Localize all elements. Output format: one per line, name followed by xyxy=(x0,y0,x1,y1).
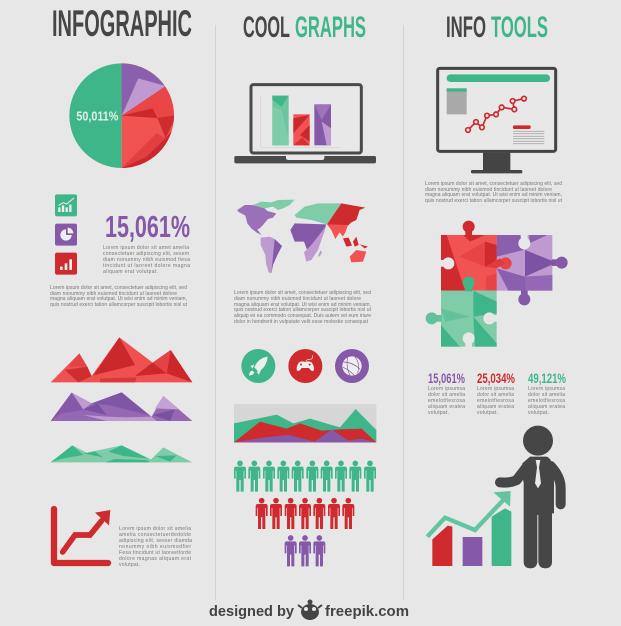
title: Cool Graphs xyxy=(243,11,366,44)
text block: chart note: amelia consectetuerdedolde xyxy=(119,532,191,538)
pie chart xyxy=(69,63,174,168)
text block: centre paragraph: quis nostrud exerci tation ullamcorper suscipit lobortis nisl ut xyxy=(234,307,372,313)
stat: purple: dolor sit amelia xyxy=(428,392,465,398)
text block: right paragraph: quis nostrud exerci tation ullamcorper suscipit lobortis nisl ut xyxy=(425,198,563,204)
text block: right paragraph xyxy=(425,181,563,204)
stat: purple: aliquam eratea xyxy=(428,404,465,410)
chart: green mountains xyxy=(51,445,192,462)
chart: purple mountains xyxy=(51,392,192,421)
text block: centre paragraph: aliquip ex ea commodo consequat. Duis autem vel eum iriure xyxy=(234,313,371,319)
stat: purple: 15,061% xyxy=(428,370,465,386)
text block: stat description xyxy=(103,245,190,275)
text block: right paragraph: magna aliquam erat volutpat. Ut wisi enim ad minim veniam, xyxy=(425,192,562,198)
text block: centre paragraph: magna aliquam erat volutpat. Ut wisi enim ad minim veniam, xyxy=(234,302,371,308)
text block: stat description: Lorem ipsum dolor sit amet amelia xyxy=(103,245,189,251)
stat: red: volutpat. xyxy=(477,410,498,416)
piece: purple xyxy=(497,234,568,305)
icon: rocket xyxy=(241,349,275,383)
stat: red xyxy=(477,370,515,416)
illustration: rising bars xyxy=(427,491,511,566)
icon: desktop monitor xyxy=(438,68,556,173)
greenland and arctic xyxy=(253,200,295,210)
stat: purple: volutpat. xyxy=(428,410,449,416)
south america xyxy=(261,237,282,273)
south asia xyxy=(327,224,348,239)
bar: red xyxy=(293,114,310,145)
text block: chart note: adipiscing elit, sesser diamda xyxy=(119,538,192,544)
text block: left paragraph xyxy=(50,285,188,308)
map: world xyxy=(237,200,368,273)
text block: chart note: nonummy nibh euismodfier xyxy=(119,544,191,550)
stat: green: dolor sit amelia xyxy=(528,392,565,398)
pictogram: green people xyxy=(234,460,376,492)
icon: laptop with bars xyxy=(234,85,376,163)
russia and east asia xyxy=(327,203,365,226)
icon: freepik logo xyxy=(298,600,322,620)
stat: purple: Lorem ipsumsa xyxy=(428,386,465,392)
bar: purple xyxy=(314,104,331,145)
footer credit: designed by xyxy=(209,603,295,620)
north america xyxy=(237,205,276,235)
stat: 15,061%: 15,061% xyxy=(105,209,190,244)
text block: chart note: Lorem ipsum dolor sit amelia xyxy=(119,526,191,532)
text block: chart note: Fesa tincidunt ut laoreetlorde xyxy=(119,550,191,556)
text block: centre paragraph: diam nonummy nibh euismod tincidunt ut laoreet dolore xyxy=(234,296,361,302)
text block: stat description: tincidunt ut laoreet dolore magna xyxy=(103,263,190,269)
stat: green xyxy=(528,370,566,416)
icon: red growth chart xyxy=(54,509,110,563)
text block: right paragraph: diam nonummy nibh euismod tincidunt ut laoreet dolore xyxy=(425,187,552,193)
text block: stat description: diam nonummy nibh euismod fiesa xyxy=(103,257,190,263)
title: Cool Graphs: COOL xyxy=(243,11,290,44)
stat: red: Lorem ipsumsa xyxy=(477,386,514,392)
africa xyxy=(290,223,326,262)
text block: left paragraph: magna aliquam erat volutpat. Ut wisi enim ad minim veniam, xyxy=(50,296,187,302)
stat: purple xyxy=(428,370,465,416)
icon: bar tile xyxy=(55,253,77,275)
pictogram: red people xyxy=(256,498,354,529)
text block: left paragraph: quis nostrud exerci tation ullamcorper suscipit lobortis nisl ut xyxy=(50,302,188,308)
islands xyxy=(343,237,368,248)
chart: area chart xyxy=(234,404,376,442)
text block: stat description: aliquam erat volutpat. xyxy=(103,269,158,275)
text block: left paragraph: diam nonummy nibh euismod tincidunt ut laoreet dolore xyxy=(50,291,177,297)
stat: red: 25,034% xyxy=(477,370,515,386)
illustration: businessman xyxy=(500,426,561,568)
footer credit xyxy=(209,600,409,620)
text block: stat description: consectetuer adipiscing elit, sesem xyxy=(103,251,189,257)
text block: left paragraph: Lorem ipsum dolor sit amet, consectetuer adipiscing elit, sed xyxy=(50,285,187,291)
title: Info Tools xyxy=(446,11,548,44)
stat: purple: emelotfiesrosa xyxy=(428,398,465,404)
text block: chart note xyxy=(119,526,192,568)
text block: chart note: dolore magnas aliquam erat xyxy=(119,556,192,562)
stat: red: emelotfiesrosa xyxy=(477,398,514,404)
bar: green xyxy=(272,96,289,145)
line chart xyxy=(466,96,526,132)
puzzle: jigsaw pieces xyxy=(426,221,568,347)
text block: right paragraph: Lorem ipsum dolor sit amet, consectetuer adipiscing elit, sed xyxy=(425,181,562,187)
text block: centre paragraph xyxy=(234,290,372,325)
piece: green xyxy=(426,277,497,347)
stat: green: emelotfiesrosa xyxy=(528,398,565,404)
chart: red mountains xyxy=(51,337,192,382)
australia xyxy=(350,250,366,262)
stat: green: volutpat. xyxy=(528,410,549,416)
icon: game controller xyxy=(288,349,322,383)
icon: pie tile xyxy=(55,224,77,246)
stat: green: Lorem ipsumsa xyxy=(528,386,565,392)
title: Info Tools: TOOLS xyxy=(491,11,548,44)
stat: red: dolor sit amelia xyxy=(477,392,514,398)
title: Infographic: INFOGRAPHIC xyxy=(52,3,192,44)
stat: red: aliquam eratea xyxy=(477,404,514,410)
pictogram: purple people xyxy=(285,535,325,566)
footer credit: freepik.com xyxy=(325,603,409,620)
title: Cool Graphs: GRAPHS xyxy=(295,11,366,44)
europe xyxy=(295,203,341,224)
piece: red xyxy=(440,221,512,291)
title: Info Tools: INFO xyxy=(446,11,486,44)
text block: centre paragraph: Lorem ipsum dolor sit amet, consectetuer adipiscing elit, sed xyxy=(234,290,371,296)
icon: basketball xyxy=(335,349,369,383)
stat: green: aliquam eratea xyxy=(528,404,565,410)
text block: chart note: volutpat. xyxy=(119,562,140,568)
pie label: 50,011% xyxy=(76,109,119,124)
text block: centre paragraph: dolor in hendrerit in vulputate velit esse molestie consequat xyxy=(234,319,369,325)
stat: green: 49,121% xyxy=(528,370,566,386)
icon: line chart tile xyxy=(55,194,77,216)
